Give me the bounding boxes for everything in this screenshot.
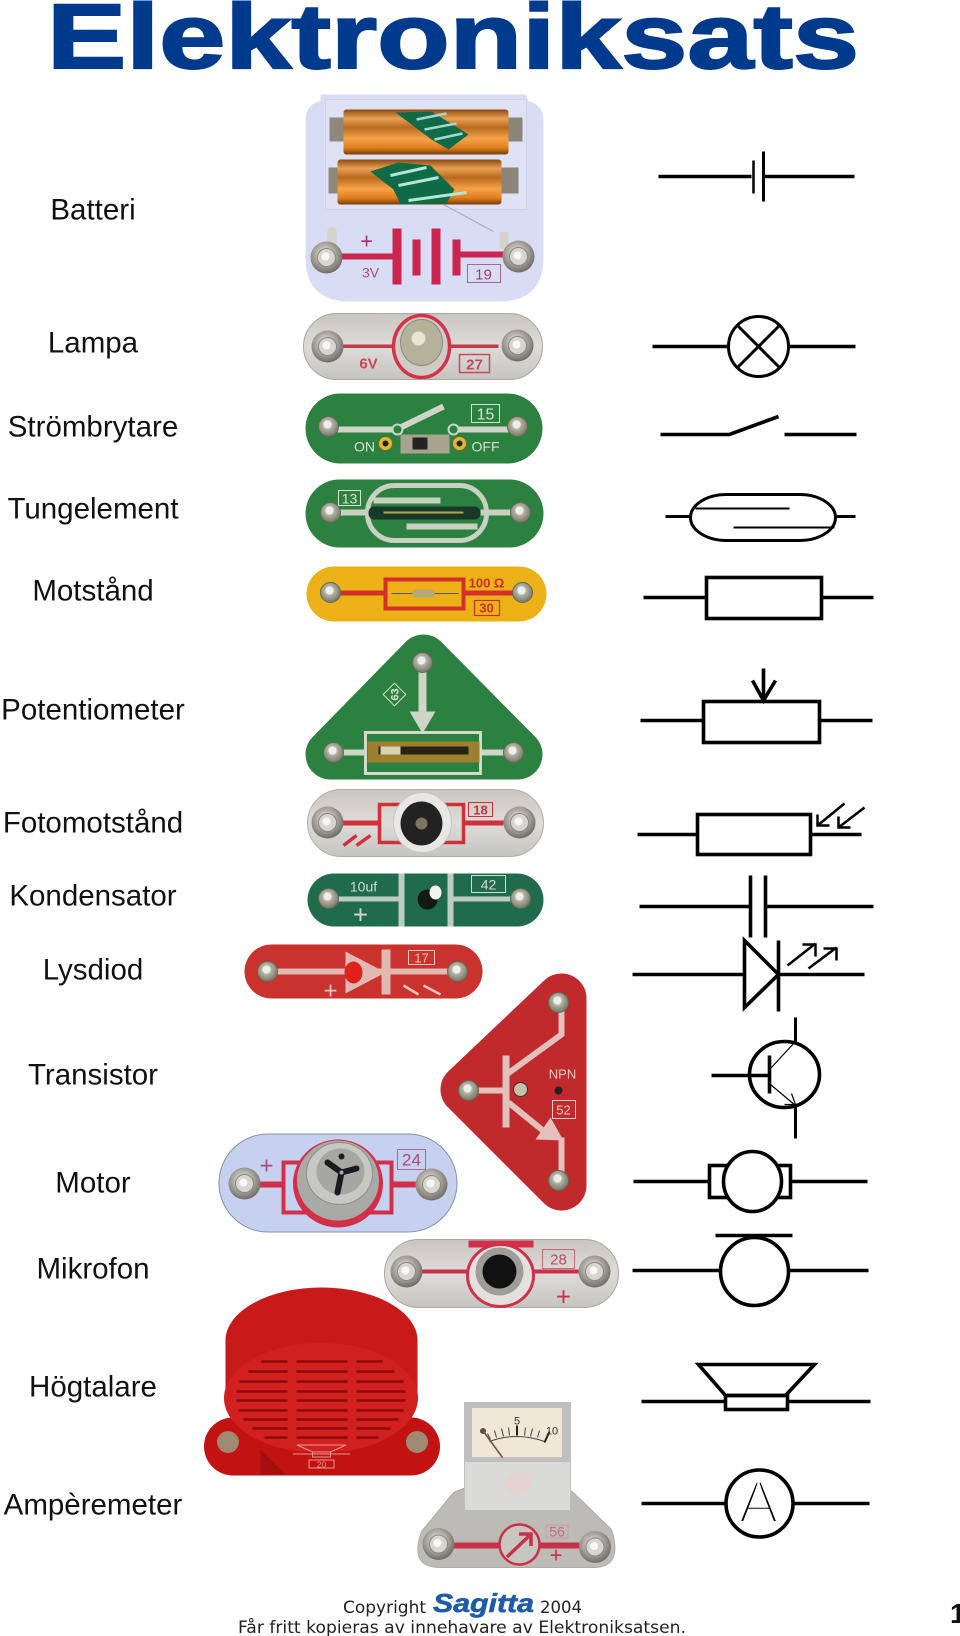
footer: copyright line: 2004 — [540, 1598, 582, 1618]
module: microphone: + — [556, 1282, 571, 1312]
label: Kondensator: Kondensator — [9, 880, 177, 912]
module: resistor: 100 Ω — [469, 576, 504, 590]
label: Lampa: Lampa — [48, 326, 139, 360]
symbol: transistor — [712, 1018, 820, 1138]
symbol: photoresistor — [638, 804, 864, 854]
module: microphone — [384, 1240, 618, 1312]
module: ammeter — [418, 1402, 615, 1568]
module: switch: ON — [354, 438, 375, 454]
symbol: battery — [658, 152, 854, 202]
module: resistor: 30 — [479, 600, 494, 616]
footer: copyright line: Copyright — [343, 1598, 426, 1618]
symbol: potentiometer — [640, 668, 872, 742]
module: photoresistor: 18 — [473, 802, 488, 818]
module: potentiometer: 63 — [390, 688, 402, 701]
symbol: lamp — [652, 316, 856, 376]
module: ammeter: 5 — [514, 1416, 520, 1428]
module: battery holder: 3V — [362, 264, 380, 280]
module: lamp: 27 — [466, 356, 483, 374]
module: resistor — [306, 566, 546, 622]
module: capacitor — [308, 874, 544, 930]
module: motor: 24 — [402, 1150, 421, 1170]
symbol: microphone — [632, 1236, 868, 1306]
module: speaker — [204, 1288, 440, 1476]
footer: copyright line — [343, 1588, 582, 1618]
module: ammeter: 10 — [546, 1426, 558, 1438]
module: ammeter: + — [550, 1542, 562, 1568]
symbol: capacitor — [640, 876, 874, 938]
label: Motstånd: Motstånd — [32, 574, 154, 608]
battery 1 — [344, 110, 508, 154]
symbol: reed element — [666, 494, 856, 540]
module: transistor: 52 — [556, 1102, 571, 1118]
symbol: switch — [660, 416, 856, 434]
label: Lysdiod: Lysdiod — [43, 954, 143, 986]
battery symbol on plate — [342, 228, 508, 284]
module: reed element — [306, 480, 544, 548]
label: Fotomotstånd: Fotomotstånd — [3, 806, 183, 840]
module: switch: OFF — [472, 438, 500, 454]
symbol: speaker — [642, 1364, 870, 1410]
symbol: motor — [634, 1152, 868, 1212]
symbol: resistor — [644, 578, 874, 618]
module: motor: + — [259, 1152, 274, 1180]
label: Strömbrytare: Strömbrytare — [8, 410, 178, 444]
module: transistor — [458, 992, 576, 1190]
module: motor — [219, 1134, 457, 1232]
module: capacitor: 42 — [481, 876, 496, 892]
label: Ampèremeter: Ampèremeter — [4, 1488, 183, 1522]
label: Transistor: Transistor — [28, 1058, 158, 1092]
module: capacitor: 10uf — [350, 878, 377, 894]
label: Motor: Motor — [55, 1166, 131, 1200]
module: capacitor: + — [353, 900, 368, 930]
symbol: ammeter: A — [738, 1468, 779, 1536]
label: Högtalare: Högtalare — [29, 1370, 157, 1404]
label: Potentiometer: Potentiometer — [1, 694, 185, 726]
label: Mikrofon: Mikrofon — [36, 1252, 150, 1286]
module: lamp: 6V — [359, 356, 378, 372]
module: LED: 17 — [414, 950, 429, 966]
module: lamp — [304, 314, 542, 380]
module: switch: 15 — [477, 406, 494, 424]
module: switch — [306, 394, 542, 464]
module: ammeter: 56 — [549, 1524, 565, 1540]
module: reed element: 13 — [342, 490, 357, 506]
label: Batteri: Batteri — [50, 194, 136, 226]
battery 2 — [338, 160, 502, 204]
module: LED: + — [323, 978, 338, 1004]
module: transistor: NPN — [549, 1066, 576, 1082]
label: Tungelement: Tungelement — [7, 492, 179, 526]
module: battery holder: + — [360, 228, 373, 254]
module: speaker: 20 — [317, 1460, 326, 1470]
module: potentiometer — [324, 652, 524, 774]
module: microphone: 28 — [550, 1252, 567, 1268]
symbol: ammeter — [642, 1468, 870, 1537]
module: photoresistor — [308, 790, 544, 856]
footer: copyright line: Sagitta — [433, 1588, 534, 1618]
module: battery holder — [306, 94, 544, 302]
module: battery holder: 19 — [475, 266, 492, 284]
symbol: LED — [632, 940, 864, 1012]
module: LED — [244, 944, 482, 1004]
